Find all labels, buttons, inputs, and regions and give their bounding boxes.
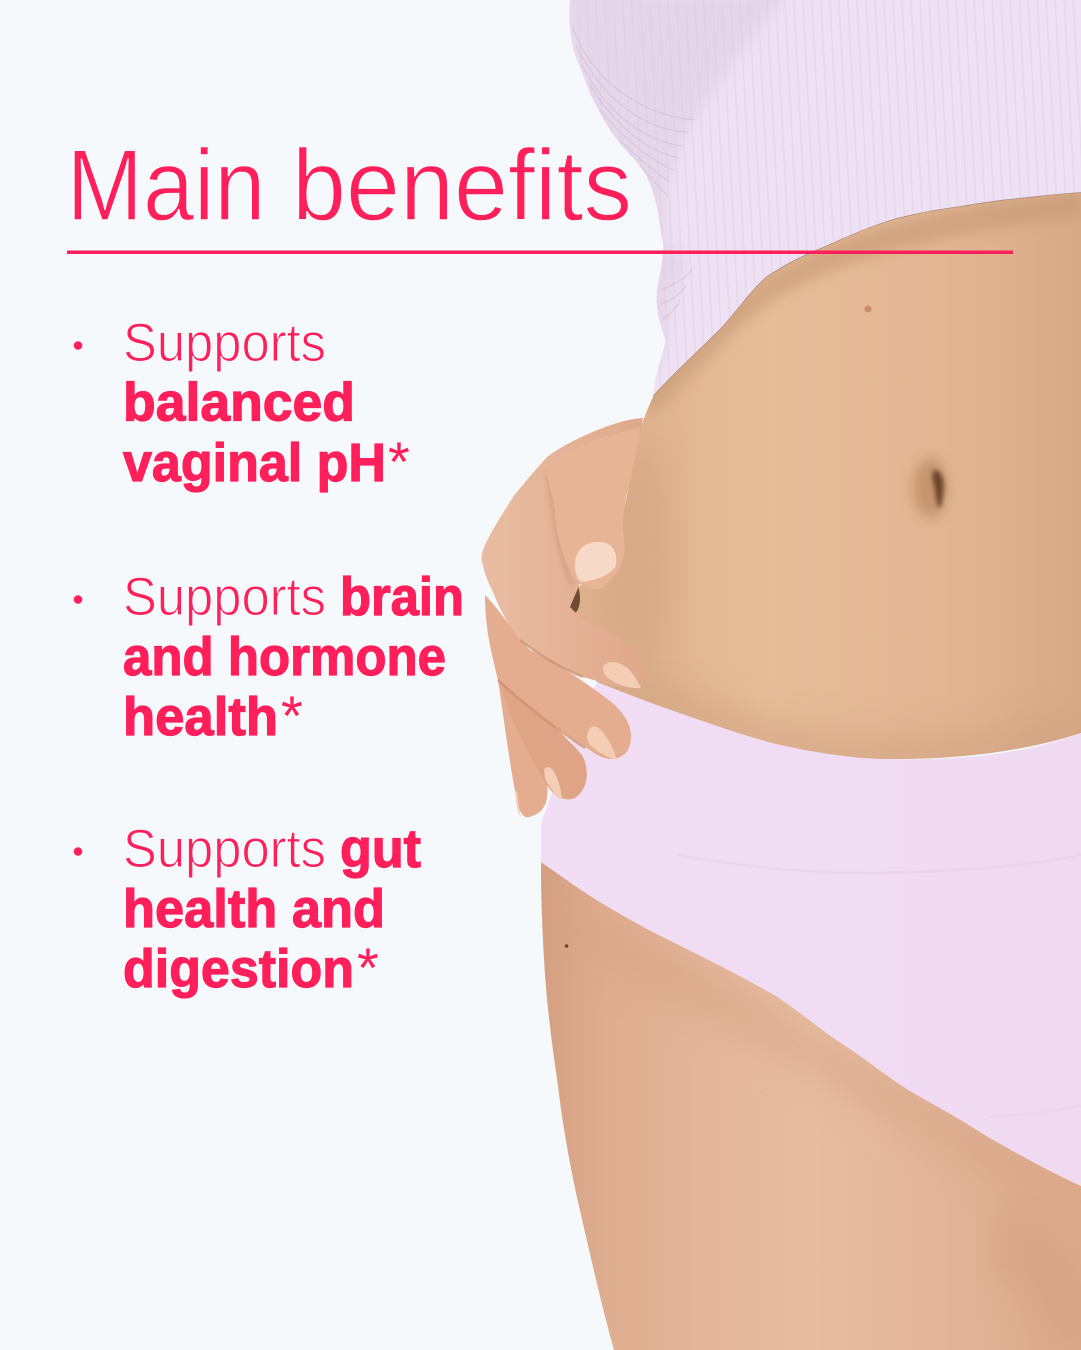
knuckle crease [547, 473, 572, 585]
divider rule [67, 250, 1013, 254]
little finger [496, 668, 547, 817]
benefit 3: gut health and digestion: Supports [123, 819, 326, 879]
navel [913, 458, 947, 518]
bullet [74, 595, 82, 604]
belly shading [597, 205, 1081, 759]
benefit 2: brain and hormone health: * [281, 684, 303, 747]
thumb nail [575, 542, 616, 582]
back of hand and index finger [482, 418, 645, 688]
benefit 2: brain and hormone health: and hormone [123, 627, 446, 687]
benefit 2: brain and hormone health: brain [340, 567, 464, 627]
benefit 1: balanced vaginal pH: vaginal pH [123, 433, 386, 493]
crop top hem shadow [653, 193, 1081, 397]
benefit 3: gut health and digestion [74, 819, 421, 999]
belly mole [864, 306, 872, 312]
benefit 2: brain and hormone health: Supports [123, 567, 326, 627]
benefit 3: gut health and digestion: health and [123, 879, 385, 939]
benefit 3: gut health and digestion: digestion [123, 939, 354, 999]
thigh shading [686, 983, 1079, 1328]
title: Main [66, 130, 266, 242]
photo: torso with hand on hip [482, 0, 1081, 1350]
ring nail [544, 767, 562, 800]
underwear [541, 682, 1081, 1186]
dark gap between thumb and index [568, 583, 580, 613]
benefit 1: balanced vaginal pH: * [388, 430, 410, 493]
thigh mole [565, 944, 568, 948]
thumb [547, 428, 640, 589]
thigh [541, 862, 1081, 1350]
hand [482, 418, 645, 817]
benefit 1: balanced vaginal pH [74, 313, 410, 493]
title: benefits [292, 130, 632, 242]
benefit 3: gut health and digestion: * [357, 936, 379, 999]
crop top [560, 0, 1081, 400]
benefit 1: balanced vaginal pH: balanced [123, 372, 355, 432]
index nail [603, 662, 641, 688]
benefit 2: brain and hormone health [74, 567, 464, 747]
ring finger [496, 668, 587, 799]
benefit 1: balanced vaginal pH: Supports [123, 313, 326, 373]
benefit 2: brain and hormone health: health [123, 687, 278, 747]
little nail [516, 790, 521, 817]
underwear lower seam [988, 1106, 1081, 1117]
bullet [74, 341, 82, 350]
bullet [74, 847, 82, 856]
benefit 3: gut health and digestion: gut [340, 819, 421, 879]
folded ribbed side [570, 0, 775, 330]
middle finger [485, 595, 631, 759]
torso skin [560, 100, 1081, 759]
title [66, 130, 632, 242]
finger separation shadows [498, 640, 585, 748]
horizontal ribs [572, 25, 695, 320]
middle nail [587, 726, 617, 760]
underwear waistband seam [678, 855, 1081, 873]
